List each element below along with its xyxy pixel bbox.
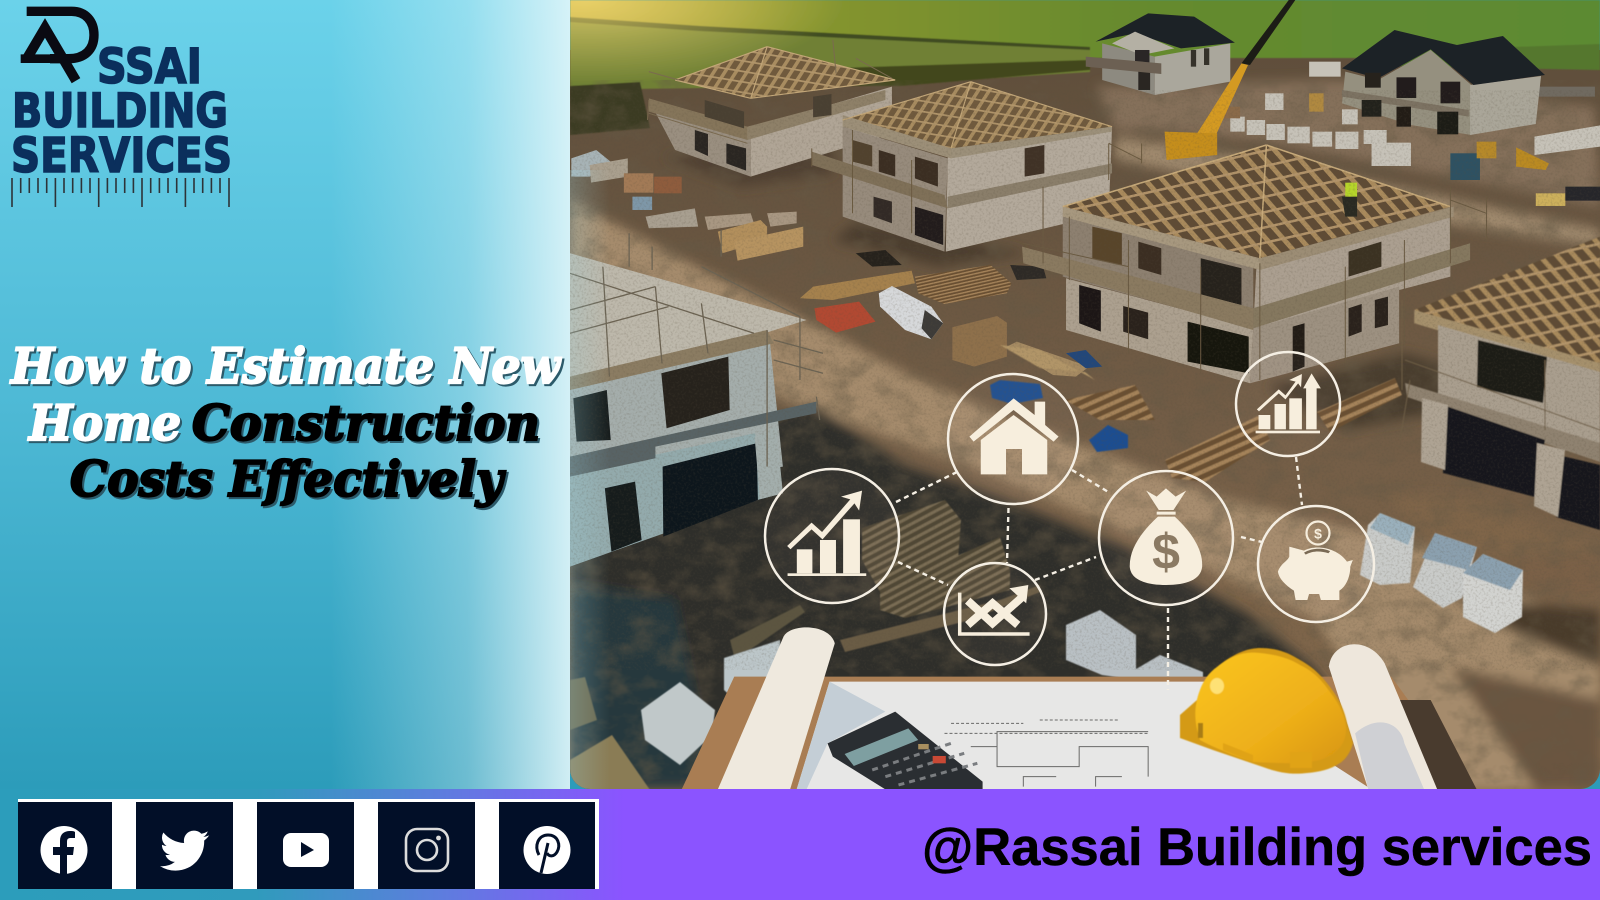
left edge haze (570, 170, 610, 800)
blueprint paper (797, 682, 1372, 789)
dirt road (570, 200, 1600, 789)
social icon strip (18, 799, 599, 889)
calculator (828, 712, 983, 789)
lumber bundle two (880, 537, 1010, 618)
upper wall (1438, 325, 1600, 445)
construction materials (570, 345, 1523, 790)
right house roof (1414, 237, 1600, 378)
upper window (1477, 340, 1547, 403)
loose boards (840, 585, 1040, 652)
left paper roll (718, 627, 835, 789)
blue tarps (990, 380, 1043, 404)
logo mark: AR monogram (21, 11, 94, 81)
icon: twitter (136, 802, 233, 889)
back materials yard (1214, 62, 1600, 206)
teal lower-left tint (570, 587, 702, 789)
pillars (1421, 398, 1448, 470)
ground zones blurred (570, 80, 1600, 789)
scene drawn in scaled coordinates (570, 0, 1600, 567)
title: Costs Effectively (70, 450, 506, 508)
house: center-left timber frame (812, 82, 1142, 252)
upper wall (570, 340, 783, 500)
icon: money bag in circle (1099, 471, 1233, 605)
logo: BUILDING (12, 84, 228, 139)
right-side shadow (1450, 597, 1600, 667)
hard hat (1180, 648, 1353, 774)
right paper roll (1329, 644, 1437, 789)
icon: zigzag chart in circle (944, 563, 1046, 665)
house shadows (833, 220, 1030, 267)
pallets centre (1066, 610, 1136, 680)
main timber frame house (1022, 145, 1487, 383)
paper shade (797, 682, 885, 789)
social handle: @Rassai Building services (922, 818, 1592, 877)
side door (605, 482, 642, 552)
back yard (1096, 80, 1600, 207)
title: Construction (192, 394, 540, 452)
house: right edge (1400, 237, 1600, 530)
icon: youtube (257, 802, 354, 889)
icon: rising bar chart in circle (765, 469, 899, 603)
pillar (754, 436, 783, 500)
window two (661, 357, 730, 428)
balcony band (1405, 383, 1600, 462)
logo: SERVICES (11, 128, 232, 184)
lumber piles by road (1165, 415, 1270, 482)
icon: money bag in circle: $ (1152, 524, 1180, 580)
green field (570, 0, 1600, 136)
balcony deck (570, 402, 816, 477)
house: far middle finished (1086, 13, 1235, 95)
blueprint table group (682, 627, 1477, 789)
icon: growth chart in circle (1236, 352, 1340, 456)
logo (11, 11, 232, 207)
icon: facebook (18, 802, 112, 889)
house: far right finished (1342, 30, 1545, 135)
lumber stacks (718, 220, 1012, 304)
title: Home (27, 394, 181, 452)
mixer, bricks, crate (814, 250, 1102, 377)
bottom gradient bar (0, 789, 1600, 900)
window one (573, 390, 611, 442)
lumber bundle one (862, 500, 961, 592)
ground mottling (570, 80, 1600, 790)
icon: house in circle (948, 374, 1078, 504)
roof deck (570, 253, 807, 380)
logo ruler (12, 178, 229, 207)
logo wordmark: SSAI (97, 39, 202, 95)
floor plan lines (944, 720, 1148, 787)
left edge piles (571, 150, 797, 230)
garage opening (663, 443, 758, 537)
ground shadow lower-left (570, 398, 1330, 750)
icon: piggy bank in circle: $ (1314, 526, 1322, 542)
panel: construction site photo scene (570, 0, 1600, 800)
crane (1165, 0, 1295, 160)
fine grain (570, 90, 1600, 670)
eave (570, 330, 774, 390)
table (682, 677, 1473, 789)
pallets right (1360, 513, 1523, 633)
title (9, 337, 562, 508)
left scaffold house (570, 230, 823, 567)
diagram connector lines (896, 457, 1302, 690)
lower wall (570, 433, 783, 567)
icon: piggy bank in circle (1258, 506, 1374, 622)
garage opening (1443, 405, 1545, 497)
title: How to Estimate New (9, 337, 562, 395)
house: back-left timber frame (648, 40, 895, 177)
icon: pinterest (499, 802, 595, 889)
pallets left (641, 682, 715, 765)
back road (1115, 137, 1600, 247)
icon: instagram (378, 802, 475, 889)
panel: left gradient background (0, 0, 570, 789)
ground (570, 50, 1600, 789)
